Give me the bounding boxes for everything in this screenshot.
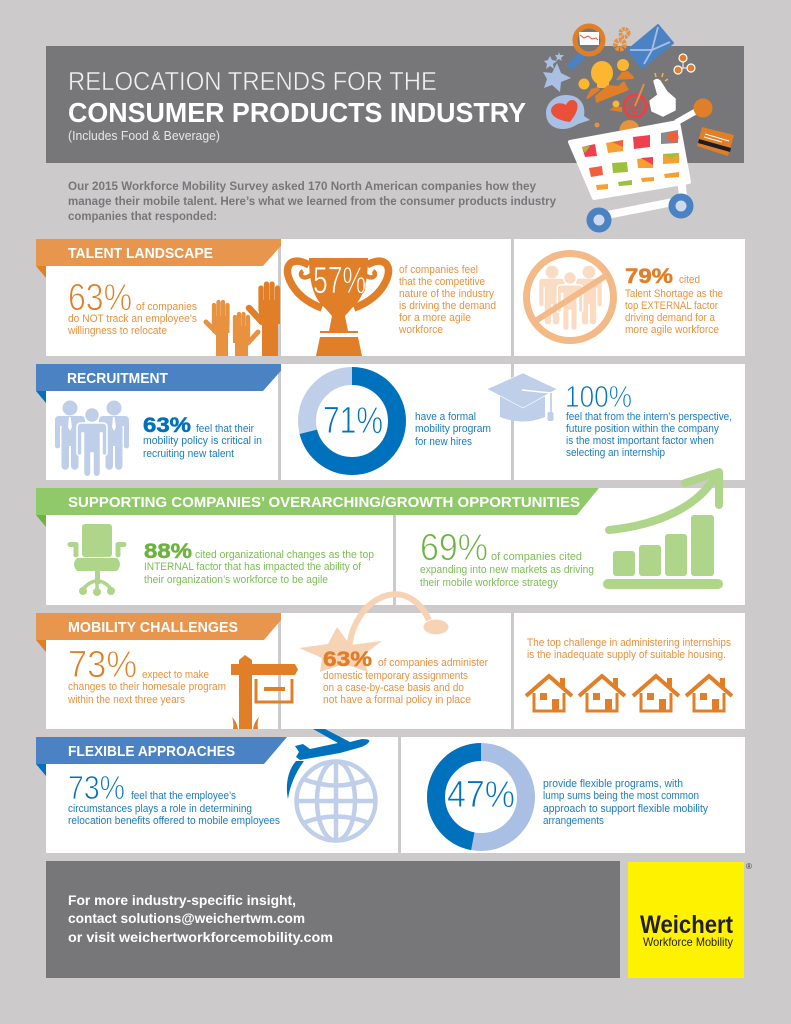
- stat description: [543, 778, 708, 827]
- stat description: provide flexible programs, with: [543, 778, 683, 790]
- stat description: their organization’s workforce to be agile: [144, 574, 328, 586]
- text: housing challenge: [527, 637, 731, 661]
- icon: growth chart with arrow: [603, 472, 723, 589]
- logo: Weichert: Workforce Mobility: [643, 935, 733, 949]
- icon: business people: [55, 400, 129, 477]
- panel: housing challenge: [514, 613, 745, 729]
- icon: graduation cap: [487, 373, 557, 422]
- stat description: [566, 411, 732, 459]
- panel: 88 percent: [46, 488, 393, 605]
- icon: star with curved arrow: [299, 594, 448, 672]
- contact text: contact solutions@weichertwm.com: [68, 911, 305, 926]
- stat description: [143, 423, 262, 460]
- stat description: approach to support flexible mobility: [543, 803, 708, 815]
- ribbon: recruitment: [36, 364, 287, 403]
- logo: Weichert: [628, 862, 752, 978]
- icon: pointing hand: [650, 73, 675, 116]
- section: supporting companies: [36, 472, 745, 605]
- stat: 57%: 57%: [313, 260, 366, 302]
- stat description: do NOT track an employee’s: [68, 313, 197, 325]
- stat: 88%: 88%: [144, 540, 192, 563]
- contact text: [68, 893, 333, 945]
- section: flexible approaches: [36, 729, 745, 853]
- panel: 100 percent: [487, 364, 745, 480]
- icon: houses: [526, 676, 732, 711]
- stat description: [67, 301, 197, 337]
- donut chart: 47%: [436, 752, 526, 842]
- stat description: willingness to relocate: [67, 325, 167, 337]
- stat description: [68, 790, 280, 827]
- contact text: For more industry-specific insight,: [68, 893, 296, 908]
- panel: 69 percent: [396, 472, 745, 605]
- stat description: [323, 657, 488, 706]
- stat description: have a formal: [415, 411, 476, 423]
- stat description: workforce: [398, 324, 443, 336]
- stat description: is the most important factor when: [566, 435, 714, 447]
- ribbon: mobility challenges: [36, 613, 287, 652]
- stat description: within the next three years: [67, 694, 185, 706]
- stat description: top EXTERNAL factor: [625, 300, 718, 312]
- stat description: [625, 274, 723, 336]
- panel: 79 percent: [514, 239, 745, 356]
- icon: shopping cart with icons: [543, 25, 734, 229]
- ribbon: mobility challenges: MOBILITY CHALLENGES: [68, 619, 238, 636]
- icon: stars: [543, 52, 571, 92]
- logo: Weichert: Weichert: [640, 911, 734, 939]
- stat description: [144, 549, 374, 586]
- intro text: manage their mobile talent. Here’s what we learned from the consumer products industry: [68, 196, 557, 208]
- stat description: INTERNAL factor that has impacted the ability of: [144, 561, 362, 573]
- stat: 63%: 63%: [68, 277, 132, 319]
- panel: 63 percent temporary: [281, 594, 511, 729]
- stat: 63%: 63%: [323, 648, 372, 671]
- stat description: Talent Shortage as the: [625, 288, 723, 300]
- stat description: [420, 551, 594, 589]
- contact text: or visit weichertworkforcemobility.com: [68, 930, 333, 945]
- stat description: of companies: [136, 301, 197, 313]
- ribbon: supporting companies: SUPPORTING COMPANIES’ OVERARCHING/GROWTH OPPORTUNITIES: [68, 494, 580, 511]
- stat description: more agile workforce: [625, 324, 719, 336]
- stat description: cited organizational changes as the top: [195, 549, 374, 561]
- panel: 63 percent: [46, 239, 280, 356]
- ribbon: talent landscape: [36, 239, 287, 278]
- icon: for-sale sign: [231, 655, 298, 729]
- icon: heart speech bubble: [546, 95, 590, 129]
- stat description: lump sums being the most common: [543, 790, 699, 802]
- icon: cart body: [570, 98, 712, 229]
- stat: 79%: 79%: [625, 265, 673, 288]
- icon: yellow ball and dot: [594, 120, 640, 140]
- stat: 47%: 47%: [447, 774, 515, 816]
- panel: 73 percent flexible: [46, 729, 398, 853]
- icon: raised hands: [206, 284, 280, 356]
- title line 2: CONSUMER PRODUCTS INDUSTRY: [68, 97, 526, 128]
- ribbon: recruitment: RECRUITMENT: [67, 370, 168, 387]
- stat: 73%: 73%: [68, 769, 125, 806]
- stat description: is driving the demand: [399, 300, 496, 312]
- stat: 71%: 71%: [323, 400, 383, 442]
- stat description: nature of the industry: [399, 288, 494, 300]
- ribbon: flexible approaches: [36, 737, 287, 776]
- intro text: [68, 181, 557, 223]
- icon: credit card: [697, 127, 734, 156]
- panel: 47 percent: [401, 737, 745, 853]
- stat description: driving demand for a: [625, 312, 716, 324]
- stat description: recruiting new talent: [143, 448, 234, 460]
- text: housing challenge: The top challenge in administering internships: [527, 637, 731, 649]
- intro text: Our 2015 Workforce Mobility Survey asked 170 North American companies how they: [68, 181, 537, 193]
- logo: Weichert: ®: [746, 862, 752, 871]
- icon: globe with plane: [287, 729, 376, 841]
- icon: gears: [616, 29, 628, 49]
- icon: office chair: [70, 524, 124, 596]
- stat description: of companies administer: [378, 657, 488, 669]
- header banner: [46, 46, 744, 163]
- title line 1: RELOCATION TRENDS FOR THE: [68, 66, 437, 96]
- donut chart: 71%: [307, 376, 397, 466]
- stat description: expect to make: [142, 669, 209, 681]
- stat description: [398, 264, 496, 336]
- ribbon: talent landscape: TALENT LANDSCAPE: [68, 245, 213, 262]
- icon: network: [674, 54, 695, 74]
- stat description: circumstances plays a role in determining: [68, 803, 252, 815]
- stat description: not have a formal policy in place: [323, 694, 471, 706]
- icon: envelope: [628, 25, 673, 68]
- stat description: relocation benefits offered to mobile employees: [68, 815, 280, 827]
- stat: 69%: 69%: [420, 527, 488, 569]
- stat: 63%: 63%: [143, 414, 191, 437]
- stat description: for new hires: [415, 436, 472, 448]
- stat description: domestic temporary assignments: [323, 670, 468, 682]
- stat description: selecting an internship: [566, 447, 665, 459]
- section: talent landscape: [36, 239, 745, 356]
- stat: 100%: 100%: [565, 379, 632, 414]
- panel: 71 percent: [281, 364, 511, 480]
- stat description: feel that from the intern’s perspective,: [566, 411, 732, 423]
- icon: target: [624, 84, 646, 117]
- stat description: arrangements: [543, 815, 604, 827]
- panel: 63 percent recruitment: [46, 364, 278, 480]
- text: housing challenge: is the inadequate supply of suitable housing.: [527, 649, 726, 661]
- stat description: mobility program: [415, 423, 491, 435]
- stat description: feel that the employee’s: [131, 790, 236, 802]
- stat description: feel that their: [196, 423, 254, 435]
- stat: 73%: 73%: [68, 644, 137, 686]
- icon: magnifier: [572, 26, 603, 65]
- subtitle: (Includes Food & Beverage): [68, 128, 220, 143]
- ribbon: supporting companies: [36, 488, 599, 527]
- panel: 73 percent homesale: [46, 613, 278, 729]
- stat description: [67, 669, 226, 706]
- stat description: future position within the company: [566, 423, 719, 435]
- stat description: mobility policy is critical in: [143, 435, 262, 447]
- stat description: on a case-by-case basis and do: [323, 682, 464, 694]
- section: recruitment: [36, 364, 745, 480]
- stat description: for a more agile: [399, 312, 471, 324]
- stat description: that the competitive: [399, 276, 485, 288]
- stat description: of companies feel: [399, 264, 478, 276]
- icon: people: [578, 59, 634, 112]
- section: mobility challenges: [36, 594, 745, 729]
- icon: no people: [526, 254, 614, 340]
- intro text: companies that responded:: [68, 211, 217, 223]
- icon: trophy: [287, 258, 389, 356]
- ribbon: flexible approaches: FLEXIBLE APPROACHES: [68, 743, 235, 760]
- stat description: expanding into new markets as driving: [420, 564, 594, 576]
- panel: 57 percent: [281, 239, 511, 356]
- stat description: their mobile workforce strategy: [420, 577, 558, 589]
- stat description: [415, 411, 491, 448]
- footer contact panel: [46, 861, 620, 978]
- stat description: cited: [679, 274, 700, 286]
- stat description: of companies cited: [491, 551, 582, 563]
- stat description: changes to their homesale program: [68, 681, 226, 693]
